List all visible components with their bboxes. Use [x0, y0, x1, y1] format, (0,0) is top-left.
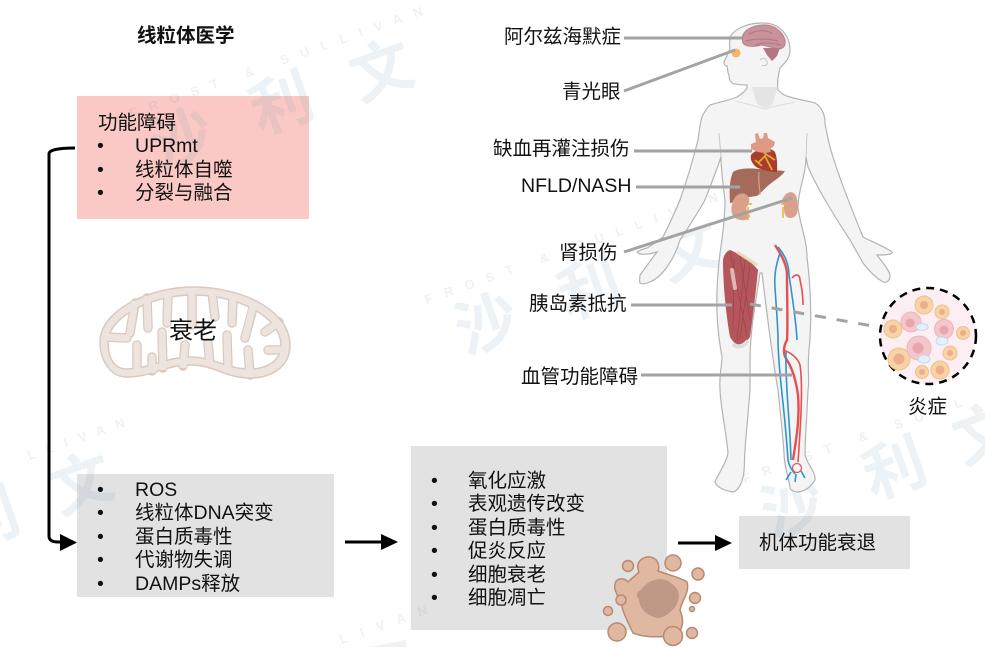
cellular effects list	[431, 470, 585, 609]
stressors list: •	[97, 549, 104, 571]
watermark: 沙	[141, 97, 223, 183]
label: ischemia reperfusion: 缺血再灌注损伤	[493, 138, 630, 160]
panel: dysfunction background	[77, 96, 309, 219]
inflammation circle	[880, 288, 976, 384]
bracket arrow	[49, 148, 77, 551]
cellular effects list: 表观遗传改变	[468, 493, 585, 515]
dysfunction list: •	[97, 182, 104, 204]
watermark: FROST & SULLIVAN	[422, 189, 720, 307]
label: aging: 衰老	[169, 318, 217, 344]
cellular effects list: •	[431, 540, 438, 562]
dysfunction list: •	[97, 135, 104, 157]
label: insulin resistance: 胰岛素抵抗	[529, 293, 627, 315]
dysfunction list: 线粒体自噬	[135, 159, 233, 181]
watermark: FROST & SULL	[740, 394, 964, 486]
label: Alzheimer's: 阿尔兹海默症	[504, 26, 621, 48]
arrow	[345, 534, 398, 550]
cellular effects list: 细胞凋亡	[468, 587, 546, 609]
label: kidney injury: 肾损伤	[559, 242, 618, 264]
cellular effects list: •	[431, 470, 438, 492]
human body	[637, 23, 892, 492]
label: kidney injury	[559, 198, 792, 264]
watermark: 文	[341, 29, 423, 115]
label: vascular dysfunction: 血管功能障碍	[521, 366, 638, 388]
stressors list: •	[97, 573, 104, 595]
stressors list: 代谢物失调	[135, 549, 233, 571]
watermark: 利	[549, 247, 631, 333]
arrow	[678, 535, 732, 551]
organ: heart	[751, 133, 777, 172]
stressors list: 蛋白质毒性	[135, 526, 233, 548]
stressors list: DAMPs释放	[135, 573, 240, 595]
cellular effects list: 蛋白质毒性	[468, 517, 566, 539]
watermark: 文	[41, 442, 123, 528]
organ: eye	[732, 48, 740, 58]
dysfunction list: UPRmt	[135, 135, 198, 157]
label: inflammation: 炎症	[908, 396, 947, 418]
stressors list: •	[97, 502, 104, 524]
title: 线粒体医学	[137, 24, 235, 47]
stressors list: ROS	[135, 479, 177, 501]
watermark: 文	[649, 209, 731, 295]
dysfunction list: 功能障碍	[98, 112, 176, 134]
organ: kidneys	[731, 192, 798, 220]
label: glaucoma	[562, 50, 735, 103]
watermark: 沙	[446, 282, 528, 368]
watermark: 沙	[752, 465, 834, 551]
dysfunction list	[97, 112, 233, 204]
watermark: LLIVAN	[25, 415, 127, 463]
panel: stressors background	[77, 474, 334, 597]
organ: liver	[730, 168, 785, 203]
cellular effects list: 氧化应激	[468, 470, 546, 492]
watermark: LIVAN	[337, 602, 429, 647]
stressors list	[97, 479, 274, 595]
stressors list: 线粒体DNA突变	[135, 502, 274, 524]
icon: apoptotic cell	[604, 555, 704, 646]
panel: cellular effects background	[411, 446, 667, 630]
icon: mitochondrion	[100, 287, 290, 378]
functional decline label: 机体功能衰退	[759, 532, 876, 554]
dysfunction list: 分裂与融合	[135, 182, 233, 204]
cellular effects list: •	[431, 564, 438, 586]
cellular effects list: 细胞衰老	[468, 564, 546, 586]
label: glaucoma: 青光眼	[562, 81, 621, 103]
organ: brain	[742, 25, 785, 61]
stressors list: •	[97, 479, 104, 501]
watermark: 利	[854, 427, 936, 513]
watermark: FROST & SULLIVAN	[127, 3, 425, 121]
stressors list: •	[97, 526, 104, 548]
cellular effects list: •	[431, 587, 438, 609]
blood vessels	[775, 245, 805, 482]
cellular effects list: •	[431, 493, 438, 515]
dysfunction list: •	[97, 159, 104, 181]
panel: functional decline background	[739, 516, 910, 569]
watermark: 利	[241, 62, 323, 148]
cellular effects list: 促炎反应	[468, 540, 546, 562]
dashed connector	[750, 304, 878, 327]
label: NFLD/NASH: NFLD/NASH	[521, 175, 632, 197]
cellular effects list: •	[431, 517, 438, 539]
organ: muscle	[723, 250, 758, 346]
